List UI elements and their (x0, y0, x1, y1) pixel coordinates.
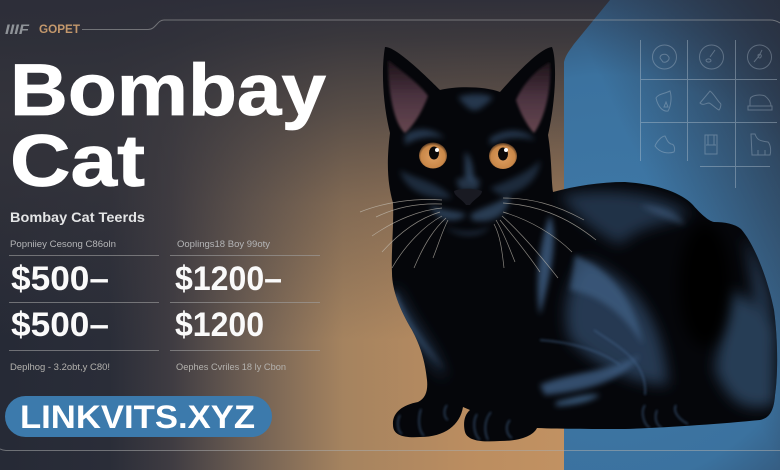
icon: bed (748, 95, 772, 110)
cat silhouette (383, 47, 777, 441)
footnotes (10, 362, 286, 373)
paw and tail detail (398, 330, 688, 440)
grid lines (640, 40, 777, 188)
icon: paw circle (652, 45, 676, 69)
price values: $1200– (175, 260, 282, 298)
haunch shadow (679, 223, 731, 347)
icon grid (640, 40, 777, 188)
icon: bird (700, 91, 721, 110)
price values: $1200 (175, 306, 264, 344)
subtitle: Bombay Cat Teerds (10, 209, 145, 225)
icon: brush circle (700, 45, 724, 69)
panel: blue backdrop (564, 0, 780, 470)
icon: sitting cat (655, 136, 675, 153)
icon: cat head (656, 91, 671, 111)
brand name: GOPET (39, 24, 80, 36)
illustration: black cat (360, 47, 777, 441)
icons (652, 45, 772, 155)
title (10, 50, 326, 202)
footnotes: Deplhog - 3.2obt,y C80! (10, 362, 110, 373)
footnotes: Oephes Cvriles 18 ly Cbon (176, 362, 286, 373)
fur highlights (392, 94, 776, 440)
price values: $500– (11, 260, 109, 298)
title: Bombay (10, 50, 326, 131)
whiskers (360, 198, 596, 278)
price values: $500– (11, 306, 109, 344)
brand logo (5, 21, 80, 37)
icon: left eye (419, 142, 447, 168)
ear: left inner (388, 60, 428, 133)
icon: llama cat (751, 134, 771, 155)
ear: right inner (516, 62, 550, 133)
icon: carrier (705, 135, 717, 154)
nose (454, 189, 482, 205)
table rules (9, 256, 320, 350)
column labels: Ooplings18 Boy 99oty (177, 239, 270, 250)
title: Cat (10, 121, 145, 202)
logo mark: IIIF (5, 21, 30, 37)
column labels: Popniiey Cesong C86oln (10, 239, 116, 250)
url badge: LINKVITS.XYZ (20, 399, 255, 435)
icon: right eye (489, 143, 517, 169)
icon: toy circle (748, 45, 772, 69)
price table (9, 239, 320, 373)
price values (11, 260, 282, 344)
column labels (10, 239, 270, 250)
